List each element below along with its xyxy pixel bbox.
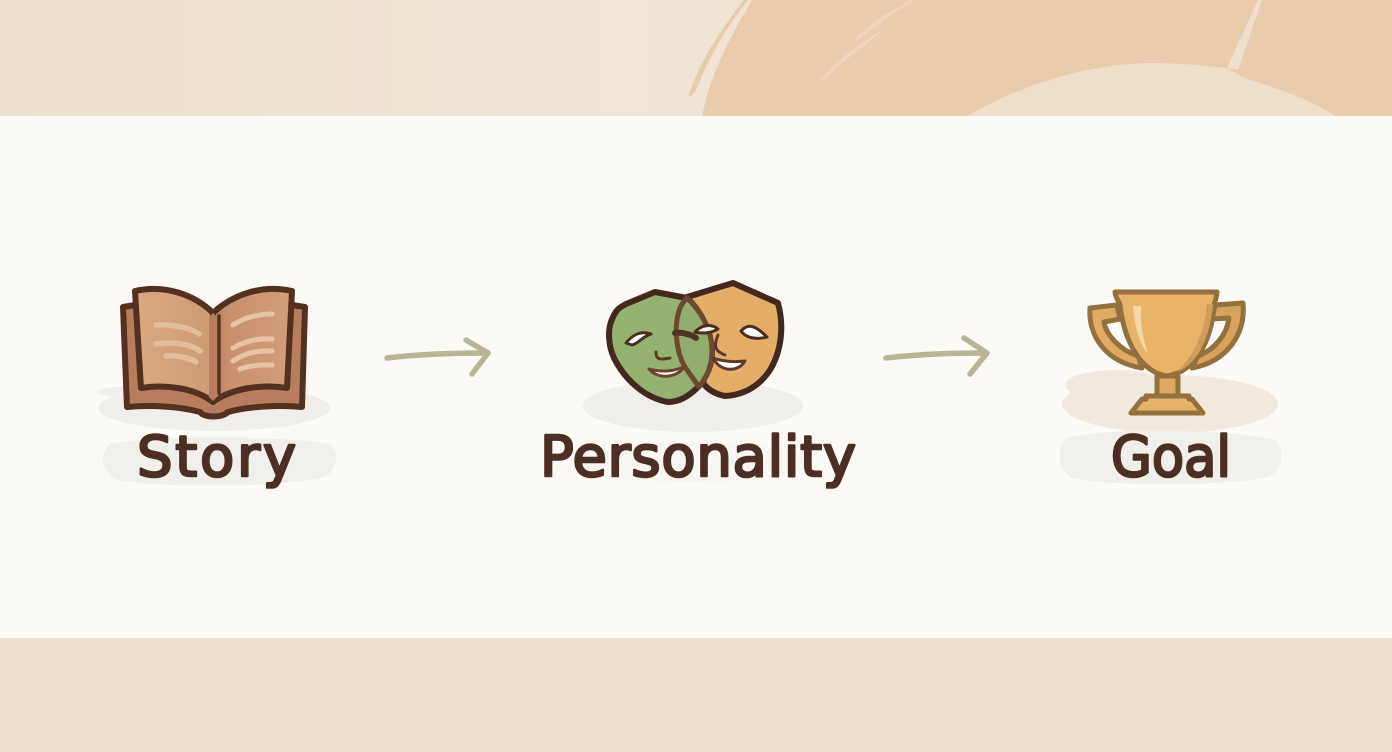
step: goal: [1059, 292, 1281, 490]
icon: open book: [123, 289, 305, 416]
overlap outline: [676, 298, 712, 387]
central white panel: [0, 116, 1392, 638]
right text lines: [233, 314, 272, 369]
label: story: Story: [137, 425, 296, 490]
cup: [1115, 292, 1217, 376]
spine line: [217, 316, 221, 393]
shadow under trophy: [1062, 370, 1278, 433]
arrow: story to personality: [387, 340, 488, 374]
base: [1131, 396, 1203, 413]
book cover: [123, 305, 305, 416]
label backdrop: story: [103, 438, 336, 486]
icon: theatre masks: [609, 283, 781, 402]
label: goal: Goal: [1111, 425, 1231, 490]
handles: [1090, 305, 1142, 368]
eyes: [626, 326, 767, 345]
dark eye smudge: [675, 333, 696, 338]
orange mask: [687, 283, 781, 396]
icon: trophy: [1090, 292, 1243, 413]
cup shade: [1176, 304, 1213, 372]
spine strip: [209, 313, 219, 401]
label backdrop: personality: [570, 442, 810, 482]
peach brush arc: [702, 0, 1392, 118]
left text lines: [156, 325, 200, 362]
pale streak: [1227, 0, 1262, 70]
arrow: personality to goal: [886, 338, 987, 374]
shadow under book: [98, 385, 330, 431]
left page: [135, 289, 213, 402]
bottom background band: [0, 638, 1392, 752]
green mask: [609, 292, 712, 402]
label: personality: Personality: [540, 425, 856, 490]
peach brush sliver: [688, 0, 748, 97]
label backdrop: goal: [1059, 431, 1281, 484]
step: personality: [540, 283, 856, 490]
right page: [213, 289, 292, 402]
noses and mouths: [656, 335, 725, 359]
stem: [1157, 376, 1178, 396]
step: story: [98, 289, 336, 490]
cup highlight: [1133, 306, 1148, 354]
shadow under masks: [583, 380, 803, 432]
top background band: [0, 0, 1392, 118]
pale semicircle inside arc: [964, 63, 1338, 118]
